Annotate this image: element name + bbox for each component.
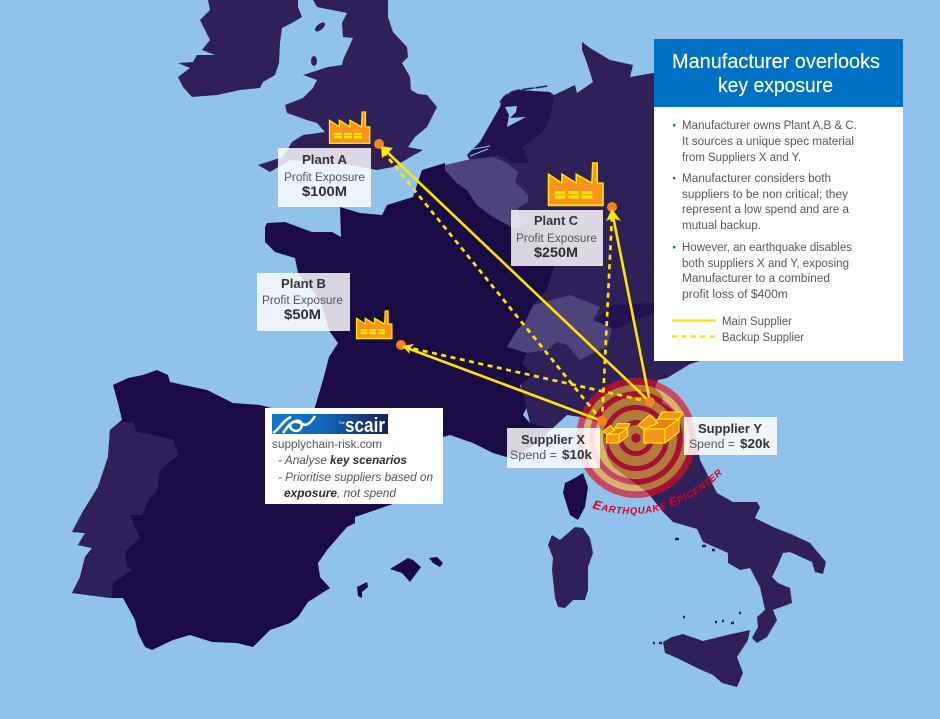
label: Plant C: Profit Exposure — [516, 231, 597, 245]
logo: SCAIR: scair — [345, 415, 385, 437]
label: Supplier X — [507, 428, 600, 468]
bullet: non critical suppliers: mutual backup. — [682, 218, 761, 232]
label: Plant B: Profit Exposure — [262, 293, 343, 307]
bullet: earthquake impact: Manufacturer to a combined — [682, 271, 830, 285]
panel heading — [654, 39, 903, 107]
callout: SCAIR: , not spend — [337, 486, 396, 500]
label: Plant B: $50M — [284, 306, 321, 322]
legend: Backup Supplier — [722, 330, 804, 344]
legend: Main Supplier — [722, 314, 792, 328]
label: Plant A: Profit Exposure — [284, 170, 365, 184]
label: Plant C: $250M — [534, 244, 578, 260]
panel: key exposure — [654, 39, 903, 361]
location dots — [374, 139, 655, 426]
backup line: Y to Plant B — [406, 347, 650, 402]
backup line: X to Plant A — [381, 149, 602, 421]
map: central Europe and Italy — [467, 42, 826, 643]
map: countries — [72, 0, 826, 687]
bullet: earthquake impact: profit loss of $400m — [682, 287, 788, 301]
factory: Plant A — [330, 112, 370, 143]
backup line: X to Plant C — [602, 215, 612, 421]
callout: SCAIR: exposure — [284, 486, 337, 500]
panel heading: key exposure — [718, 74, 833, 97]
map: Corsica — [563, 473, 588, 520]
map: IJsselmeer — [505, 106, 526, 127]
bullet: plants and suppliers — [673, 118, 857, 164]
map: Hebrides island — [313, 21, 327, 33]
map: Mallorca — [390, 558, 421, 582]
bullet: non critical suppliers — [673, 171, 849, 232]
bullet: non critical suppliers: suppliers to be non critical; they — [682, 187, 849, 201]
main line: X to Plant B — [407, 348, 602, 421]
box icon: Supplier X — [603, 424, 630, 443]
map: Zeeland delta — [468, 146, 490, 156]
bullet: plants and suppliers: from Suppliers X and Y. — [682, 150, 801, 164]
label: Supplier Y: Supplier Y — [698, 421, 762, 436]
callout: SCAIR: - Analyse — [278, 453, 327, 467]
map: Ibiza — [357, 582, 368, 598]
label: Supplier Y — [684, 417, 777, 455]
panel heading: Manufacturer overlooks — [672, 50, 880, 73]
bullet: earthquake impact: However, an earthquake disables — [682, 240, 852, 254]
label: Supplier X: Supplier X — [521, 432, 585, 447]
earthquake rings — [576, 378, 696, 498]
bullet: plants and suppliers: Manufacturer owns Plant A,B & C. — [682, 118, 857, 132]
main line: Y to Plant C — [613, 216, 650, 402]
map: Austria dark band — [592, 303, 660, 330]
label: Plant B — [257, 273, 350, 331]
main line: Y to Plant A — [386, 151, 650, 402]
label: Supplier X: Spend = — [510, 448, 557, 462]
factory: Plant B — [356, 311, 392, 339]
map: Portugal — [72, 422, 179, 598]
bullet: non critical suppliers: represent a low spend and are a — [682, 202, 849, 216]
label: Plant C — [511, 210, 603, 266]
box icon: Supplier Y — [638, 412, 683, 443]
label: Supplier Y: $20k — [740, 436, 771, 451]
map: Switzerland — [507, 295, 612, 360]
arrowheads — [381, 146, 621, 354]
bullet: plants and suppliers: It sources a unique spec material — [682, 134, 854, 148]
label: Plant C: Plant C — [534, 213, 579, 228]
map: small Italian islands — [653, 539, 741, 643]
map: Spain — [72, 370, 443, 650]
map: Netherlands — [467, 90, 554, 163]
label: Plant A — [278, 148, 371, 207]
map: Sicily — [663, 630, 750, 687]
map: Sardinia — [548, 527, 593, 608]
map: Belgium — [445, 157, 528, 228]
label: Supplier X: $10k — [562, 447, 593, 462]
callout: SCAIR: - Prioritise suppliers based on — [278, 470, 433, 484]
callout: SCAIR — [265, 408, 443, 504]
map: Frisian islands — [500, 86, 548, 103]
logo: SCAIR — [272, 414, 388, 437]
earthquake epicenter caption: EARTHQUAKE EPICENTER — [592, 469, 722, 516]
label: Plant B: Plant B — [281, 276, 326, 291]
logo: SCAIR: The — [338, 420, 346, 425]
map: France — [265, 163, 555, 504]
callout: SCAIR: supplychain-risk.com — [272, 437, 382, 451]
label: Supplier Y: Spend = — [689, 437, 735, 451]
map: Menorca — [429, 557, 443, 567]
map: Ireland — [178, 0, 302, 97]
callout: SCAIR: key scenarios — [330, 453, 407, 467]
map: Isle of Man — [311, 56, 317, 66]
legend — [672, 314, 804, 344]
label: Plant A: $100M — [302, 183, 347, 199]
bullet: non critical suppliers: Manufacturer considers both — [682, 171, 831, 185]
map: Great Britain — [258, 0, 437, 172]
factory: Plant C — [548, 163, 603, 205]
supply lines — [381, 149, 650, 421]
bullet: earthquake impact — [673, 240, 852, 301]
label: Plant A: Plant A — [302, 152, 348, 167]
bullet: earthquake impact: both suppliers X and Y, exposing — [682, 256, 849, 270]
